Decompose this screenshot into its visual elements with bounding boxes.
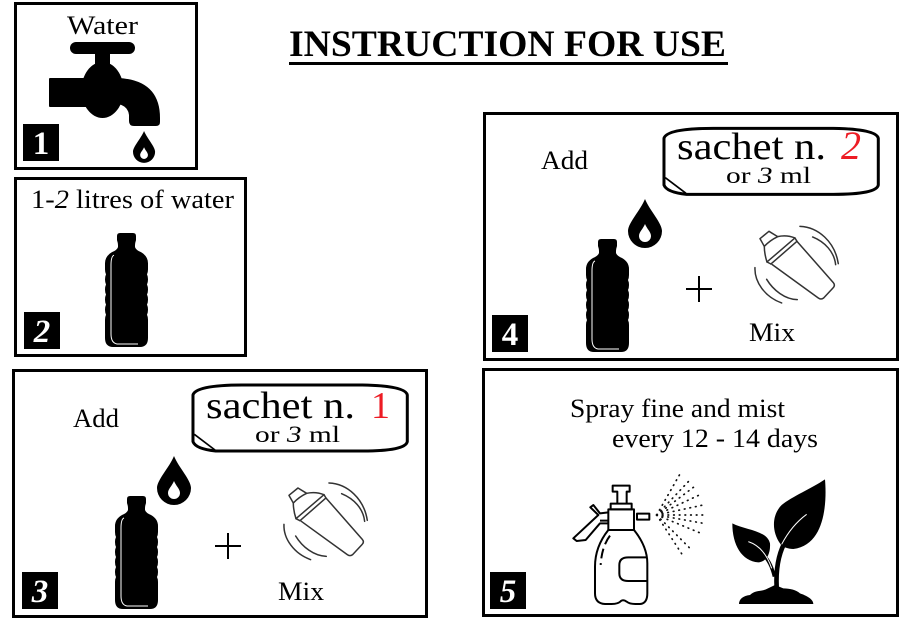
text: spray instruction: every 12 - 14 days [612, 424, 818, 453]
panel 3 frame [14, 370, 426, 616]
icon: tap [49, 42, 160, 126]
icon: water drop [133, 131, 155, 163]
label: water: Water [67, 11, 138, 40]
step number 2 [24, 312, 60, 350]
step number 1 [23, 124, 59, 162]
step number 5 [490, 572, 526, 610]
icon: plant [732, 479, 826, 604]
icon: drop [628, 199, 662, 248]
label: mix: Mix [278, 577, 324, 606]
icon: spray bottle [573, 486, 649, 604]
panel: step 4 add sachet 2 [484, 114, 898, 360]
panel 2 frame [16, 178, 246, 356]
title: INSTRUCTION FOR USE [289, 24, 726, 65]
callout: sachet 1: 1 [371, 385, 390, 427]
icon: bottle [586, 239, 629, 352]
panel: step 5 spray [484, 370, 898, 616]
callout: sachet 2: sachet n. [677, 126, 826, 168]
label: mix: Mix [749, 318, 795, 347]
callout: sachet 2: 2 [841, 123, 861, 168]
plus sign [686, 276, 712, 302]
callout: sachet 1 [193, 385, 407, 451]
panel: step 1 water tap [16, 4, 196, 168]
label: add: Add [541, 146, 588, 175]
step number 3: 3 [31, 574, 48, 610]
step number 1: 1 [33, 126, 49, 162]
callout: sachet 2 [664, 123, 878, 194]
panel 1 frame [16, 4, 196, 168]
text: spray instruction: Spray fine and mist [570, 394, 786, 423]
label: litres of water: 1-2 litres of water [31, 185, 234, 214]
callout: sachet 2: or 3 ml [726, 163, 811, 188]
step number 2: 2 [33, 314, 50, 350]
step number 4 [492, 315, 528, 353]
step number 5: 5 [500, 574, 516, 610]
step number 4: 4 [502, 317, 518, 353]
panel 5 frame [484, 370, 898, 616]
icon: bottle [105, 233, 148, 347]
plus sign [215, 533, 241, 559]
panel 4 frame [484, 114, 898, 360]
text: spray instruction [570, 394, 818, 453]
icon: shaker [755, 226, 838, 303]
icon: shaker [284, 483, 367, 560]
callout: sachet 1: or 3 ml [255, 422, 340, 447]
step number 3 [22, 572, 58, 610]
icon: drop [157, 456, 191, 505]
icon: bottle [115, 496, 158, 609]
callout: sachet 1: sachet n. [206, 385, 355, 427]
panel: step 3 add sachet 1 [14, 370, 426, 616]
icon: mist dots [657, 474, 704, 557]
panel: step 2 litres of water [16, 178, 246, 356]
label: add: Add [73, 404, 119, 433]
